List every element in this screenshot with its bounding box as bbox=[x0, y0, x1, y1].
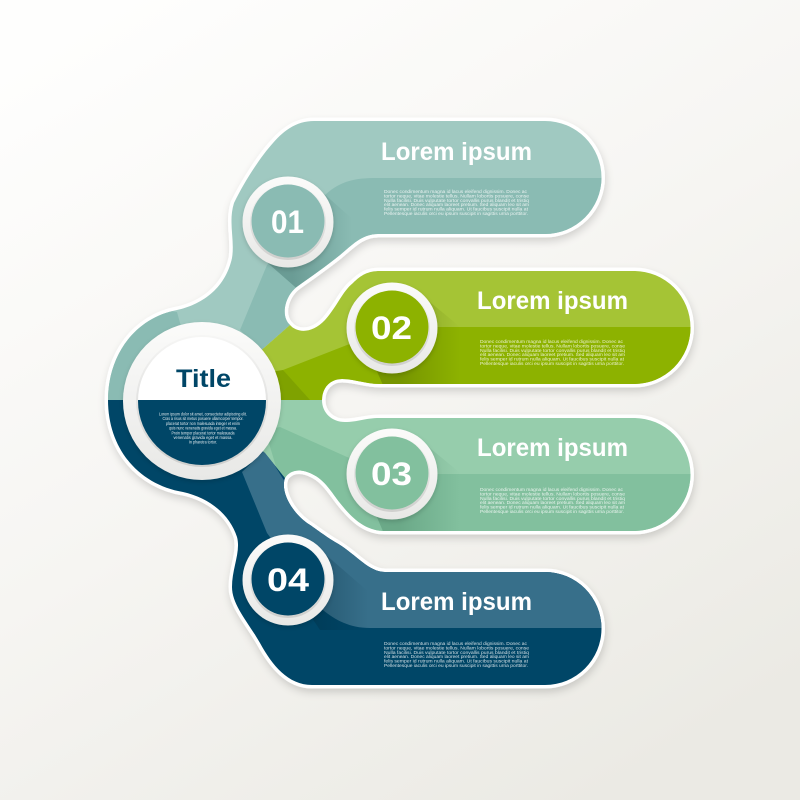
badge 03: 03 bbox=[371, 456, 412, 492]
badge 04 bbox=[242, 534, 334, 626]
panel: arm 01 teal bbox=[108, 121, 602, 400]
text block 04: elit aenean. Donec aliquam laoreet pretium. Sed aliquam leo sit am bbox=[384, 654, 529, 659]
panel: arm 02 green bbox=[262, 271, 690, 400]
text block 02: felis semper id rutrum nulla aliquam. Ut faucibus suscipit nulla at bbox=[480, 357, 625, 362]
text block 01: elit aenean. Donec aliquam laoreet pretium. Sed aliquam leo sit am bbox=[384, 202, 529, 207]
text block 04: Pellentesque iaculis orci eu ipsum suscipit in sagittis urna porttitor. bbox=[384, 663, 528, 668]
text block 03: tortor neque, vitae molestie tellus. Nullam lobortis posuere, conse bbox=[480, 491, 626, 496]
hub description: Proin tempor placerat tortor malesuada bbox=[172, 430, 235, 435]
badge 01: 01 bbox=[271, 204, 304, 240]
text block 03: felis semper id rutrum nulla aliquam. Ut faucibus suscipit nulla at bbox=[480, 505, 625, 510]
badge 02 bbox=[346, 282, 438, 374]
text block 04: felis semper id rutrum nulla aliquam. Ut faucibus suscipit nulla at bbox=[384, 659, 529, 664]
badge 03 bbox=[346, 428, 438, 520]
text block 03: Nulla facilisi. Duis vulputate tortor convallis purus blandit et tristiq bbox=[480, 496, 626, 501]
badge 01 bbox=[242, 176, 334, 268]
hub description: placerat tortor non malesuada integer et enim bbox=[166, 421, 240, 426]
text block 04: Nulla facilisi. Duis vulputate tortor convallis purus blandit et tristiq bbox=[384, 650, 530, 655]
text block 02: elit aenean. Donec aliquam laoreet pretium. Sed aliquam leo sit am bbox=[480, 352, 625, 357]
hub title: Title bbox=[176, 365, 231, 393]
text block 02: tortor neque, vitae molestie tellus. Nullam lobortis posuere, conse bbox=[480, 343, 626, 348]
text block 03: Pellentesque iaculis orci eu ipsum suscipit in sagittis urna porttitor. bbox=[480, 509, 624, 514]
hub inner white and navy disc bbox=[138, 337, 266, 465]
hub description bbox=[159, 412, 247, 445]
text block 01: Donec condimentum magna id lacus eleifend dignissim. Donec ac bbox=[384, 189, 528, 194]
text block 01 bbox=[384, 189, 530, 216]
heading 04: Lorem ipsum bbox=[381, 588, 532, 616]
hub circle bbox=[123, 322, 281, 480]
text block 01: felis semper id rutrum nulla aliquam. Ut faucibus suscipit nulla at bbox=[384, 207, 529, 212]
text block 02 bbox=[480, 339, 626, 366]
panel: arm 04 navy bbox=[100, 398, 610, 693]
text block 03 bbox=[480, 487, 626, 514]
heading 02: Lorem ipsum bbox=[477, 287, 628, 315]
panel: arm 03 mint bbox=[263, 400, 690, 531]
hub description: In pharetra tortor. bbox=[189, 440, 217, 445]
white outline and drop shadow of the four arms bbox=[108, 121, 690, 685]
badge 04: 04 bbox=[267, 562, 309, 598]
hub description: Lorem ipsum dolor sit amet, consectetur adipiscing elit. bbox=[159, 412, 247, 416]
badge 02: 02 bbox=[371, 310, 412, 346]
text block 04: tortor neque, vitae molestie tellus. Nullam lobortis posuere, conse bbox=[384, 645, 530, 650]
text block 01: tortor neque, vitae molestie tellus. Nullam lobortis posuere, conse bbox=[384, 193, 530, 198]
text block 04: Donec condimentum magna id lacus eleifend dignissim. Donec ac bbox=[384, 641, 528, 646]
hub description: Cras a risus sit metus posuere ullamcorper tempor. bbox=[162, 416, 244, 421]
text block 02: Donec condimentum magna id lacus eleifend dignissim. Donec ac bbox=[480, 339, 624, 344]
text block 02: Pellentesque iaculis orci eu ipsum suscipit in sagittis urna porttitor. bbox=[480, 361, 624, 366]
text block 01: Nulla facilisi. Duis vulputate tortor convallis purus blandit et tristiq bbox=[384, 198, 530, 203]
text block 03: Donec condimentum magna id lacus eleifend dignissim. Donec ac bbox=[480, 487, 624, 492]
heading 03: Lorem ipsum bbox=[477, 434, 628, 462]
heading 01: Lorem ipsum bbox=[381, 138, 532, 166]
hub description: venenatis gravida eget et massa. bbox=[174, 435, 232, 440]
text block 01: Pellentesque iaculis orci eu ipsum suscipit in sagittis urna porttitor. bbox=[384, 211, 528, 216]
hub description: quis nunc venenatis gravida eget et massa. bbox=[169, 426, 237, 431]
text block 04 bbox=[384, 641, 530, 668]
text block 03: elit aenean. Donec aliquam laoreet pretium. Sed aliquam leo sit am bbox=[480, 500, 625, 505]
text block 02: Nulla facilisi. Duis vulputate tortor convallis purus blandit et tristiq bbox=[480, 348, 626, 353]
